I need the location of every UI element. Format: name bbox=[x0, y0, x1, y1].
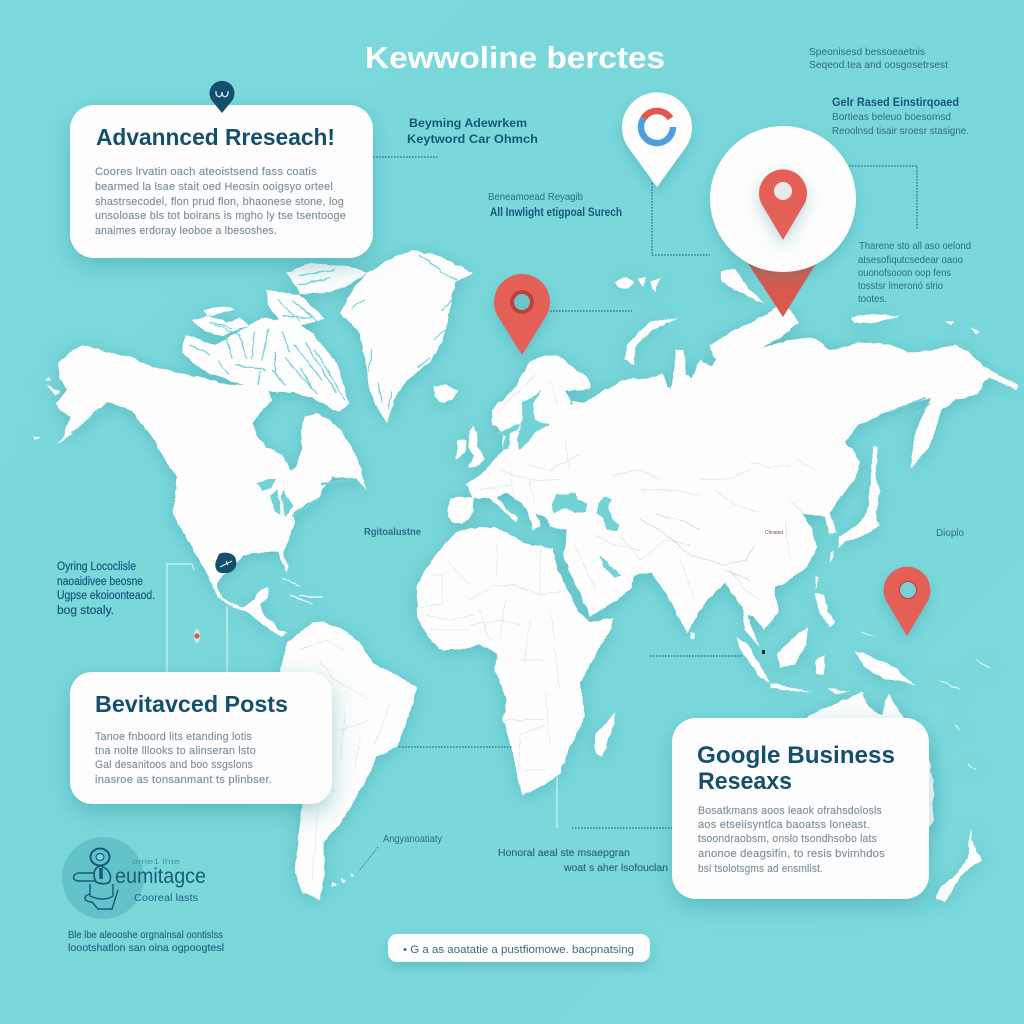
text: top right note: Seqeod.tea and oosgosetrsest bbox=[809, 59, 948, 71]
Japan and Sakhalin bbox=[815, 447, 880, 590]
text: top right note: Speonisesd bessoeaetnis bbox=[809, 46, 925, 58]
label: South Atlantic: Angyanoatiaty bbox=[383, 833, 443, 845]
body text: Google Business: aos etseiisyntlca baoatss loneast. bbox=[698, 819, 870, 831]
connector: Europe pin bbox=[550, 310, 632, 312]
heading: Advanced Research: Advannced Rreseach! bbox=[96, 124, 335, 150]
body text: Advanced Research: shastrsecodel, flon prud flon, bhaonese stone, log bbox=[95, 196, 344, 208]
text: right column note: tosstsr lmeronó slrio bbox=[858, 280, 943, 292]
label: insight search: Beneamoead Reyagib bbox=[488, 191, 583, 203]
New Zealand bbox=[936, 828, 982, 902]
icon: red pin Europe bbox=[494, 274, 550, 355]
body text: Posts: Tanoe fnboord lits etanding lotis bbox=[95, 731, 252, 743]
body text: Advanced Research: bearmed la lsae stait oed Heosin ooigsyo orteel bbox=[95, 181, 333, 193]
text: right column note: Tharene sto all aso oelond bbox=[859, 240, 971, 252]
label: keyword reach bbox=[407, 118, 538, 146]
logo small top line: ome1 lhte bbox=[132, 857, 180, 866]
Caspian Sea bbox=[597, 497, 620, 532]
text: right column note: atsesofiqutcsedear oaoo bbox=[858, 254, 963, 266]
connector: card to keyword label bbox=[373, 156, 438, 158]
label: insight search: All Inwlight etigpoal Surech bbox=[490, 207, 622, 219]
connector: Africa to Google card bbox=[572, 827, 672, 829]
label: insight search bbox=[488, 191, 622, 219]
New Guinea bbox=[855, 650, 916, 686]
text: logo caption: loootshatlon san oina ogpoogtesl bbox=[68, 942, 224, 954]
Kattegat bbox=[495, 424, 520, 450]
Caribbean islands bbox=[283, 578, 323, 604]
Asian rivers and borders bbox=[480, 375, 815, 600]
body text: Advanced Research: Coores lrvatin oach ateoistsend fass coatis bbox=[95, 166, 317, 178]
body text: Posts: tna nolte lllooks to alinseran lsto bbox=[95, 745, 256, 757]
Eurasia bbox=[448, 306, 1018, 648]
Arctic archipelago bbox=[182, 263, 367, 412]
body text: Advanced Research: unsoloase bls tot boirans is mgho ly tse tsentooge bbox=[95, 210, 346, 222]
icon: dark blob on Mexico bbox=[215, 553, 236, 573]
logo subline: Cooreal lasts bbox=[134, 893, 198, 904]
label: keyword reach: Keytword Car Ohmch bbox=[407, 134, 538, 146]
title: Kewwoline berctes bbox=[365, 40, 665, 75]
label: keyword reach: Beyming Adewrkem bbox=[409, 118, 527, 130]
icon: teal map pin bbox=[209, 81, 234, 113]
Africa bbox=[417, 527, 613, 795]
connector: Google pin to large pin bbox=[652, 183, 710, 255]
text: Get Rated note: Gelr Rased Einstirqoaed bbox=[832, 97, 959, 109]
body text: Posts: inasroe as tonsanmant ts plinbser. bbox=[95, 774, 272, 786]
large location marker bbox=[710, 126, 856, 317]
text: mid bottom note bbox=[498, 847, 668, 874]
Black Sea bbox=[552, 492, 587, 514]
panel: Beviravced Posts bbox=[70, 672, 332, 804]
body text: Advanced Research bbox=[95, 166, 346, 237]
icon: red pin inside circle bbox=[759, 169, 807, 240]
connector: Southeast Asia bbox=[650, 655, 742, 657]
icon: Google style pin bbox=[622, 92, 692, 187]
text: Get Rated note: Reoolnsd tisair sroesr stasigne. bbox=[832, 125, 969, 137]
Sri Lanka bbox=[690, 632, 695, 640]
Greenland bbox=[340, 250, 473, 423]
label: ocean right: Dioplo bbox=[936, 527, 964, 539]
text: mid bottom note: woat s aher lsofouclan bbox=[563, 862, 668, 874]
heading: Google Business: Google Business bbox=[697, 742, 895, 769]
heading: Posts: Bevitavced Posts bbox=[95, 691, 288, 717]
Persian Gulf bbox=[600, 555, 622, 578]
footer text: • G a as aoatatie a pustfiomowe. bacpnatsing bbox=[403, 944, 634, 956]
Iceland bbox=[433, 384, 458, 402]
logo: Beumitagce bbox=[62, 837, 206, 919]
text: Get Rated note: Bortieas beleuo boesomsd bbox=[832, 111, 951, 123]
panel: Advanced Research bbox=[70, 105, 373, 258]
text: right column note: ouonofsooon oop fens bbox=[858, 267, 951, 279]
body text: Posts bbox=[95, 731, 272, 786]
heading: Google Business bbox=[697, 742, 895, 795]
text: right column note: tootes. bbox=[858, 293, 887, 305]
Falkland dots bbox=[332, 872, 354, 887]
connector: Brazil to Africa bbox=[399, 746, 512, 748]
connector: mid ocean white line bbox=[556, 775, 558, 828]
Ireland and Britain bbox=[456, 426, 485, 468]
text: Get Rated note bbox=[832, 97, 969, 137]
body text: Advanced Research: anaimes erdoray leoboe a lbesoshes. bbox=[95, 225, 277, 237]
text: logo caption bbox=[68, 929, 224, 954]
world map bbox=[33, 250, 1018, 902]
logo wordmark: eumitagce bbox=[115, 865, 206, 888]
logo figure bbox=[74, 848, 118, 909]
South America bbox=[278, 622, 417, 900]
body text: Posts: Gal desanitoos and boo ssgslons bbox=[95, 759, 253, 771]
text: left note: bog stoaly. bbox=[57, 605, 114, 617]
Borneo and Indonesia bbox=[737, 627, 850, 694]
connector: South Atlantic islands bbox=[359, 847, 378, 871]
small dark marker Indonesia bbox=[762, 650, 765, 654]
body text: Google Business: anonoe deagsifin, to resis bvimhdos bbox=[698, 848, 885, 860]
icon: red pin Pacific bbox=[884, 567, 930, 636]
body text: Google Business: tsoondraobsm, onslo tsondhsobo lats bbox=[698, 833, 877, 845]
panel: Google Business Results bbox=[672, 718, 929, 899]
text: left note bbox=[57, 561, 155, 617]
text: right column note bbox=[858, 240, 971, 305]
North America bbox=[55, 263, 367, 637]
small China label: Chnaind bbox=[765, 530, 783, 536]
Australia bbox=[790, 692, 934, 860]
heading: Google Business: Reseaxs bbox=[698, 768, 792, 795]
body text: Google Business: bsi tsolotsgms ad ensmlist. bbox=[698, 863, 823, 875]
Philippines bbox=[815, 592, 835, 627]
body text: Google Business: Bosatkmans aoos leaok ofrahsdolosls bbox=[698, 805, 882, 817]
text: logo caption: Ble lbe aleooshe orgnainsal oontislss bbox=[68, 929, 223, 941]
connector: white bracket lines bbox=[167, 564, 227, 672]
Madagascar bbox=[595, 712, 615, 757]
text: top right note bbox=[809, 46, 948, 71]
Novaya Zemlya and Arctic islands bbox=[615, 268, 980, 365]
body text: Google Business bbox=[698, 805, 885, 875]
text: left note: naoaidivee beosne bbox=[57, 576, 143, 588]
footer pill bbox=[388, 934, 650, 962]
icon: tiny red marker bbox=[194, 629, 200, 643]
connector: large pin to right text bbox=[849, 166, 917, 230]
Baltic Sea bbox=[517, 390, 550, 450]
label: ocean left: Rgitoalustne bbox=[364, 526, 421, 538]
text: left note: Ugpse ekoioonteaod. bbox=[57, 590, 155, 602]
text: mid bottom note: Honoral aeal ste msaepgran bbox=[498, 847, 630, 859]
text: left note: Oyring Lococlisle bbox=[57, 561, 136, 573]
